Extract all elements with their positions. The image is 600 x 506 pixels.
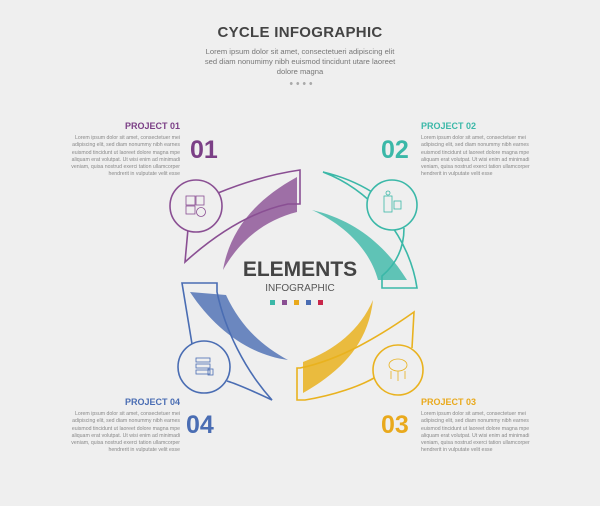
panel: project 04 text: PROJECT 04: [125, 397, 180, 407]
number 03: 03: [381, 411, 409, 439]
color squares: [270, 300, 323, 305]
dots: [288, 82, 314, 85]
center subheading: INFOGRAPHIC: [265, 283, 335, 294]
number 04: 04: [186, 411, 214, 439]
number 02: 02: [381, 136, 409, 164]
icon: robot hand: [384, 191, 401, 212]
panel: project 04 text: Lorem ipsum dolor sit amet, consectetuer mei adipiscing elit, sed diam nonummy nibh earnes euismod tincidunt ut laoreet dolore magna mpe aliquam erat volutpat. Ut wisi enim ad minimadi veniam, quisa nostrud exerci tation ullamcorper hendrerit in vulputate velit esse: [71, 411, 180, 453]
panel: project 03 text: Lorem ipsum dolor sit amet, consectetuer mei adipiscing elit, sed diam nonummy nibh earnes euismod tincidunt ut laoreet dolore magna mpe aliquam erat volutpat. Ut wisi enim ad minimadi veniam, quisa nostrud exerci tation ullamcorper hendrerit in vulputate velit esse: [421, 411, 530, 453]
icon: server: [196, 358, 213, 375]
arrow: purple 01: [170, 170, 300, 270]
panel: project 01 text: PROJECT 01: [125, 121, 180, 131]
arrow: teal 02: [312, 172, 417, 288]
icon: puzzle: [186, 196, 206, 216]
panel: project 02 text: PROJECT 02: [421, 121, 476, 131]
center heading: ELEMENTS: [243, 258, 357, 281]
arrow: yellow 03: [297, 300, 423, 400]
title: CYCLE INFOGRAPHIC: [217, 24, 383, 41]
panel: project 02 text: Lorem ipsum dolor sit amet, consectetuer mei adipiscing elit, sed diam nonummy nibh earnes euismod tincidunt ut laoreet dolore magna mpe aliquam erat volutpat. Ut wisi enim ad minimadi veniam, quisa nostrud exerci tation ullamcorper hendrerit in vulputate velit esse: [421, 135, 530, 177]
number 01: 01: [190, 136, 218, 164]
panel: project 01 text: Lorem ipsum dolor sit amet, consectetuer mei adipiscing elit, sed diam nonummy nibh earnes euismod tincidunt ut laoreet dolore magna mpe aliquam erat volutpat. Ut wisi enim ad minimadi veniam, quisa nostrud exerci tation ullamcorper hendrerit in vulputate velit esse: [71, 135, 180, 177]
panel: project 03 text: PROJECT 03: [421, 397, 476, 407]
arrow: blue 04: [178, 283, 288, 400]
icon: cloud: [389, 359, 407, 381]
subtitle: Lorem ipsum dolor sit amet, consectetueri adipiscing elit sed diam nonumimy nibh euismod tincidunt utare laoreet dolore magna: [205, 47, 395, 76]
